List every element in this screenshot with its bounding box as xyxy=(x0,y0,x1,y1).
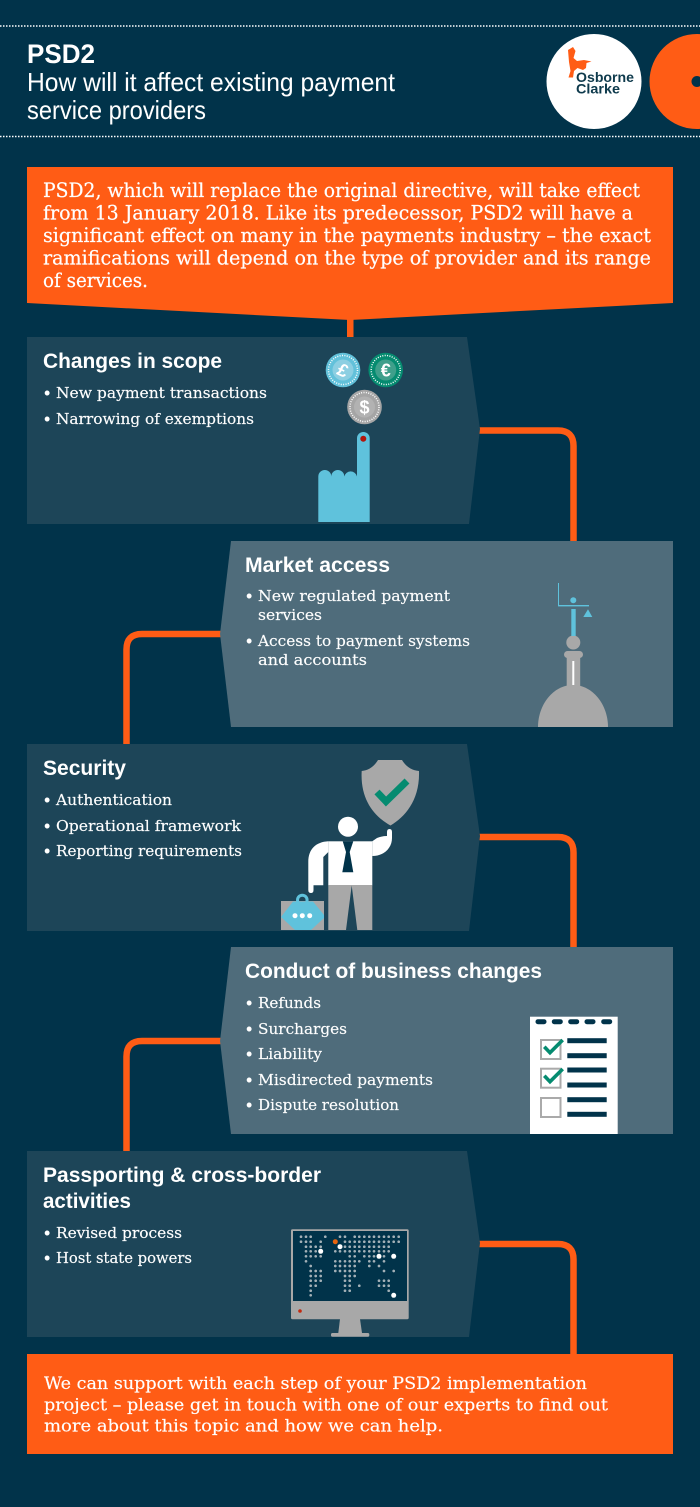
heading: security: Security xyxy=(43,757,126,780)
list: market access: New regulated payment xyxy=(258,587,450,605)
connector: market access to security xyxy=(126,634,222,745)
logo: Osborne Clarke: Clarke xyxy=(576,80,620,96)
icon: dome with weather vane xyxy=(538,583,608,727)
panel: intro callout xyxy=(27,167,673,320)
list: passporting: Revised process xyxy=(56,1224,182,1242)
list: conduct of business changes: Misdirected payments xyxy=(258,1071,433,1089)
panel: intro callout: ramifications will depend on the type of provider and its range xyxy=(43,246,651,270)
icon: orange circle emblem xyxy=(650,34,700,129)
list: conduct of business changes: Refunds xyxy=(258,994,321,1012)
list: changes in scope xyxy=(44,383,267,429)
list: changes in scope: Narrowing of exemptions xyxy=(56,410,254,428)
list: passporting xyxy=(44,1223,192,1268)
heading: passporting and cross-border activities xyxy=(43,1164,321,1213)
icon: briefcase xyxy=(281,895,324,930)
panel: intro callout: from 13 January 2018. Like its predecessor, PSD2 will have a xyxy=(43,202,633,224)
list: security: Authentication xyxy=(55,791,172,809)
panel: closing callout: We can support with each step of your PSD2 implementation xyxy=(44,1374,587,1394)
list: market access: services xyxy=(258,606,322,624)
icon: pointing hand xyxy=(318,432,370,522)
heading: changes in scope: Changes in scope xyxy=(43,350,222,373)
list: conduct of business changes: • xyxy=(246,1044,252,1064)
list: market access: and accounts xyxy=(258,651,367,669)
title: PSD2 xyxy=(27,39,95,69)
list: changes in scope: • xyxy=(44,383,50,403)
list: conduct of business changes: • xyxy=(246,1070,252,1090)
connector: security to conduct of business xyxy=(478,837,574,948)
panel: closing callout xyxy=(27,1354,673,1454)
list: market access: Access to payment systems xyxy=(257,632,470,650)
icon: dollar coin: $ xyxy=(359,398,370,418)
list: conduct of business changes: • xyxy=(246,1019,252,1039)
list: conduct of business changes: Surcharges xyxy=(258,1020,347,1038)
icon: euro coin: € xyxy=(381,360,391,380)
list: conduct of business changes: • xyxy=(246,993,252,1013)
list: security: Reporting requirements xyxy=(56,842,242,860)
panel: intro callout: PSD2, which will replace the original directive, will take effect xyxy=(43,179,640,202)
connector: changes in scope to market access xyxy=(478,430,574,542)
list: market access xyxy=(246,586,470,669)
heading: passporting and cross-border activities: activities xyxy=(43,1190,131,1213)
icon: pound coin: £ xyxy=(334,359,352,382)
icon: checklist xyxy=(530,1017,618,1134)
icon: monitor with world map xyxy=(291,1229,409,1337)
connector: intro to changes in scope xyxy=(347,315,354,338)
icon: businessman xyxy=(308,817,392,930)
heading: passporting and cross-border activities: Passporting & cross-border xyxy=(43,1164,321,1187)
list: security xyxy=(44,790,242,861)
list: changes in scope: • xyxy=(44,409,50,429)
connector: passporting to closing box xyxy=(478,1244,574,1355)
list: security: • xyxy=(44,841,50,861)
list: market access: • xyxy=(246,586,252,606)
list: conduct of business changes: Liability xyxy=(258,1045,323,1063)
logo: Osborne Clarke xyxy=(546,34,642,129)
title: service providers xyxy=(27,95,206,125)
icon: pound coin xyxy=(326,353,360,387)
icon: dollar coin xyxy=(347,390,382,424)
list: conduct of business changes xyxy=(246,993,433,1115)
list: conduct of business changes: • xyxy=(246,1095,252,1115)
list: passporting: • xyxy=(44,1248,50,1268)
panel: security xyxy=(27,744,480,931)
list: security: • xyxy=(44,790,50,810)
panel: closing callout: project – please get in touch with one of our experts to find out xyxy=(44,1396,608,1416)
list: security: • xyxy=(44,816,50,836)
title xyxy=(27,39,396,125)
list: security: Operational framework xyxy=(56,817,242,835)
heading: conduct of business changes: Conduct of business changes xyxy=(245,960,542,983)
panel: changes in scope xyxy=(27,337,480,524)
title: How will it affect existing payment xyxy=(27,67,396,97)
heading: market access: Market access xyxy=(245,554,390,577)
list: market access: • xyxy=(246,631,252,651)
panel: intro callout: significant effect on many in the payments industry – the exact xyxy=(43,224,651,247)
list: passporting: • xyxy=(44,1223,50,1243)
panel: conduct of business changes xyxy=(220,947,673,1134)
list: conduct of business changes: Dispute resolution xyxy=(258,1096,399,1114)
panel: intro callout: of services. xyxy=(43,269,148,292)
panel: market access xyxy=(220,541,673,727)
list: passporting: Host state powers xyxy=(56,1249,192,1267)
logo: Osborne Clarke: Osborne xyxy=(576,69,634,85)
panel: closing callout: more about this topic and how we can help. xyxy=(44,1416,443,1436)
icon: euro coin xyxy=(368,353,403,387)
list: changes in scope: New payment transactions xyxy=(56,384,267,402)
panel: passporting and cross-border activities xyxy=(27,1151,480,1337)
connector: conduct of business to passporting xyxy=(126,1041,222,1152)
icon: shield with tick xyxy=(362,760,419,826)
